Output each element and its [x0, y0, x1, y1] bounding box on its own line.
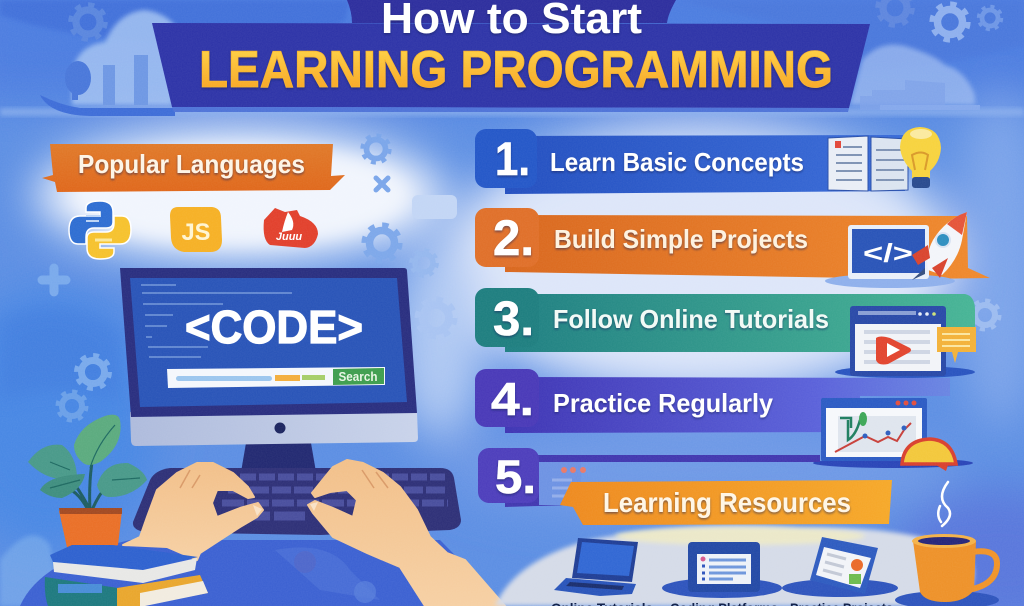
badge [475, 369, 539, 427]
badge [475, 129, 537, 188]
bar [505, 294, 975, 352]
resource: coding platforms [662, 542, 782, 606]
search bar [167, 367, 385, 388]
step 4 [475, 369, 973, 471]
decorative gears [42, 0, 1001, 420]
steam [938, 482, 950, 526]
code sidebar lines [141, 284, 292, 358]
leaves [74, 415, 121, 465]
step 5 [478, 448, 820, 507]
upper blue book [50, 545, 198, 570]
code heading: <CODE> [185, 301, 363, 353]
monitor [120, 268, 418, 472]
step 2 [475, 208, 990, 288]
number: 2. [493, 210, 534, 266]
icon: platform window [662, 542, 782, 598]
title line two: LEARNING PROGRAMMING [199, 41, 833, 99]
icon: red language logo [264, 208, 318, 248]
hand: left [123, 463, 263, 560]
icon: tilted tablet [782, 537, 898, 597]
resource: practice projects [782, 537, 898, 606]
label: Learn Basic Concepts [550, 147, 804, 177]
monitor stand [241, 443, 316, 472]
icon: progress chart and gauge [813, 398, 973, 471]
ribbon heading [42, 144, 345, 192]
step 3 [475, 288, 976, 378]
lower orange book [117, 575, 208, 606]
icon: video window and chat bubble [835, 306, 976, 378]
lower green book [45, 577, 118, 606]
desk [20, 540, 505, 606]
monitor bezel [120, 268, 417, 417]
step 1 [475, 127, 941, 194]
icon: laptop [554, 538, 638, 596]
icon: code window and rocket [825, 212, 967, 288]
number: 1. [495, 132, 530, 185]
decorative cloud and city, top right [850, 45, 980, 110]
badge [475, 288, 539, 347]
faded window lines [539, 462, 586, 505]
icon: python [69, 201, 131, 259]
heading: learning resources [560, 480, 892, 525]
icon: javascript [170, 207, 222, 252]
plant stems [55, 440, 122, 510]
search bar: Search [338, 370, 378, 384]
badge [475, 208, 539, 267]
icon: javascript: JS [182, 219, 210, 246]
label: Build Simple Projects [554, 224, 808, 254]
label: Practice Regularly [553, 388, 774, 418]
monitor screen [130, 278, 407, 407]
title banner [152, 0, 870, 112]
ribbon heading: Popular Languages [78, 149, 305, 179]
hand: right [308, 460, 505, 606]
badge [478, 448, 539, 503]
heading: learning resources: Learning Resources [603, 487, 851, 518]
number: 4. [491, 373, 534, 425]
panel: popular languages [42, 144, 345, 259]
monitor chin [130, 412, 418, 446]
books [45, 545, 208, 606]
number: 3. [493, 293, 534, 346]
decorative cloud and chart, top left [40, 10, 180, 116]
resources hill [495, 526, 974, 606]
icon: open book and light bulb [828, 127, 941, 191]
bar [505, 377, 950, 433]
bar [505, 215, 990, 279]
bar [505, 135, 905, 194]
bar [505, 455, 820, 507]
icon: code window and rocket: </> [863, 238, 913, 268]
label: Follow Online Tutorials [553, 304, 829, 334]
plant [28, 415, 147, 552]
keyboard [133, 468, 461, 535]
flower pot [59, 511, 122, 552]
icon: red language logo: Juuu [276, 231, 302, 243]
webcam [274, 422, 286, 434]
icon: coffee mug [895, 482, 999, 606]
resource: online tutorials [551, 538, 653, 606]
number: 5. [495, 450, 536, 503]
